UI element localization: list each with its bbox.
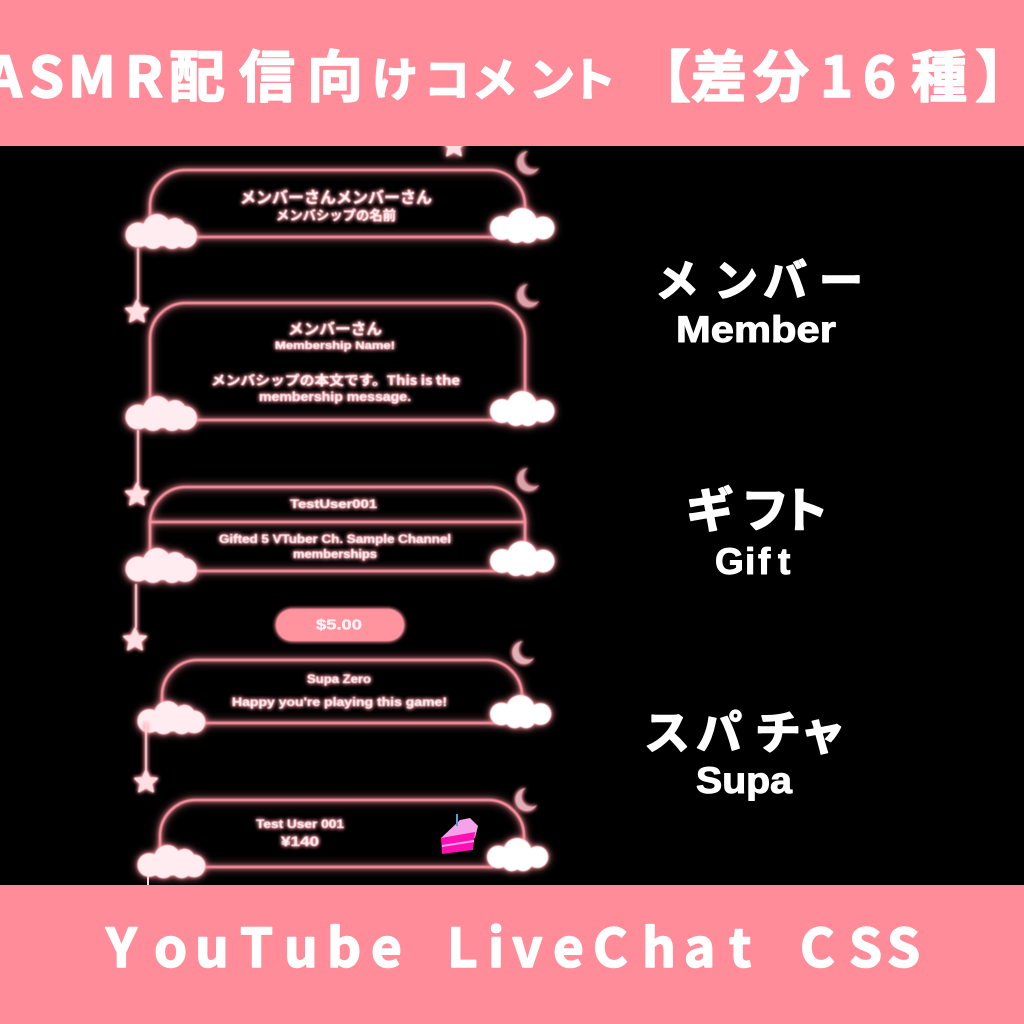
text: sticker user and price: ¥140 — [281, 833, 319, 849]
title: 【差分16種】 — [635, 33, 1024, 114]
text: membership message: membership message. — [259, 389, 411, 404]
icon: moon — [512, 641, 534, 664]
icon: moon — [515, 788, 537, 811]
string stub below sticker comment — [147, 876, 149, 885]
title: けコメント — [372, 44, 616, 110]
text: membership message: Membership Name! — [275, 340, 395, 352]
text: membership message — [211, 318, 460, 404]
header band — [0, 0, 1024, 146]
string and star 3 — [124, 584, 146, 650]
icon: right cloud — [490, 391, 554, 426]
text: supa message: Happy you're playing this game! — [232, 695, 447, 709]
title: 配信向 — [169, 33, 363, 114]
text: gift message — [219, 497, 451, 561]
pill: price — [276, 609, 404, 641]
icon: moon — [517, 284, 539, 307]
text: membership message: メンバーさん — [288, 318, 382, 339]
panel: member comment 1 — [126, 151, 554, 249]
text: member name: メンバシップの名前 — [276, 205, 396, 224]
icon: right cloud — [490, 541, 554, 576]
icon: cake sticker — [441, 814, 478, 854]
icon: right cloud — [487, 838, 548, 871]
icon: left cloud — [126, 548, 197, 583]
panel: gift comment — [126, 468, 554, 583]
text: sticker user and price — [256, 817, 344, 849]
label: gift: ギフト — [686, 471, 829, 541]
text: membership message: メンバシップの本文です。This is the — [211, 370, 460, 389]
string and star 4 — [135, 723, 157, 792]
label: supa: Supa — [696, 760, 792, 801]
label: member — [655, 245, 863, 350]
pill: price: $5.00 — [316, 616, 362, 634]
icon: left cloud — [137, 845, 205, 878]
icon: right cloud — [490, 695, 551, 728]
label: supa — [644, 697, 846, 801]
text: gift message: TestUser001 — [290, 497, 377, 511]
label: gift: Gift — [715, 541, 790, 582]
icon: left cloud — [126, 396, 197, 431]
panel: sticker comment — [137, 788, 548, 878]
label: gift — [686, 471, 829, 582]
icon: moon — [517, 468, 539, 491]
text: supa message — [232, 672, 447, 709]
text: member name — [240, 184, 432, 224]
text: gift message: Gifted 5 VTuber Ch. Sample Channel — [219, 534, 451, 546]
star: clipped at top — [443, 134, 465, 156]
title — [0, 33, 1024, 114]
panel: member comment 2 — [126, 284, 554, 431]
icon: left cloud — [137, 701, 205, 734]
footer title: YouTubeLiveChatCSS — [105, 907, 920, 983]
label: member: Member — [676, 309, 836, 350]
text: supa message: Supa Zero — [307, 672, 371, 686]
label: supa: スパチャ — [644, 697, 846, 763]
string and star 1 — [126, 248, 148, 322]
icon: left cloud — [126, 214, 197, 249]
panel: supa comment — [137, 641, 551, 734]
label: member: メンバー — [655, 245, 863, 309]
icon: moon — [517, 151, 539, 174]
text: member name: メンバーさんメンバーさん — [240, 184, 432, 208]
text: gift message: memberships — [293, 549, 377, 561]
footer band — [0, 885, 1024, 1024]
text: sticker user and price: Test User 001 — [256, 817, 344, 831]
icon: right cloud — [490, 208, 554, 243]
string and star 2 — [126, 430, 148, 504]
